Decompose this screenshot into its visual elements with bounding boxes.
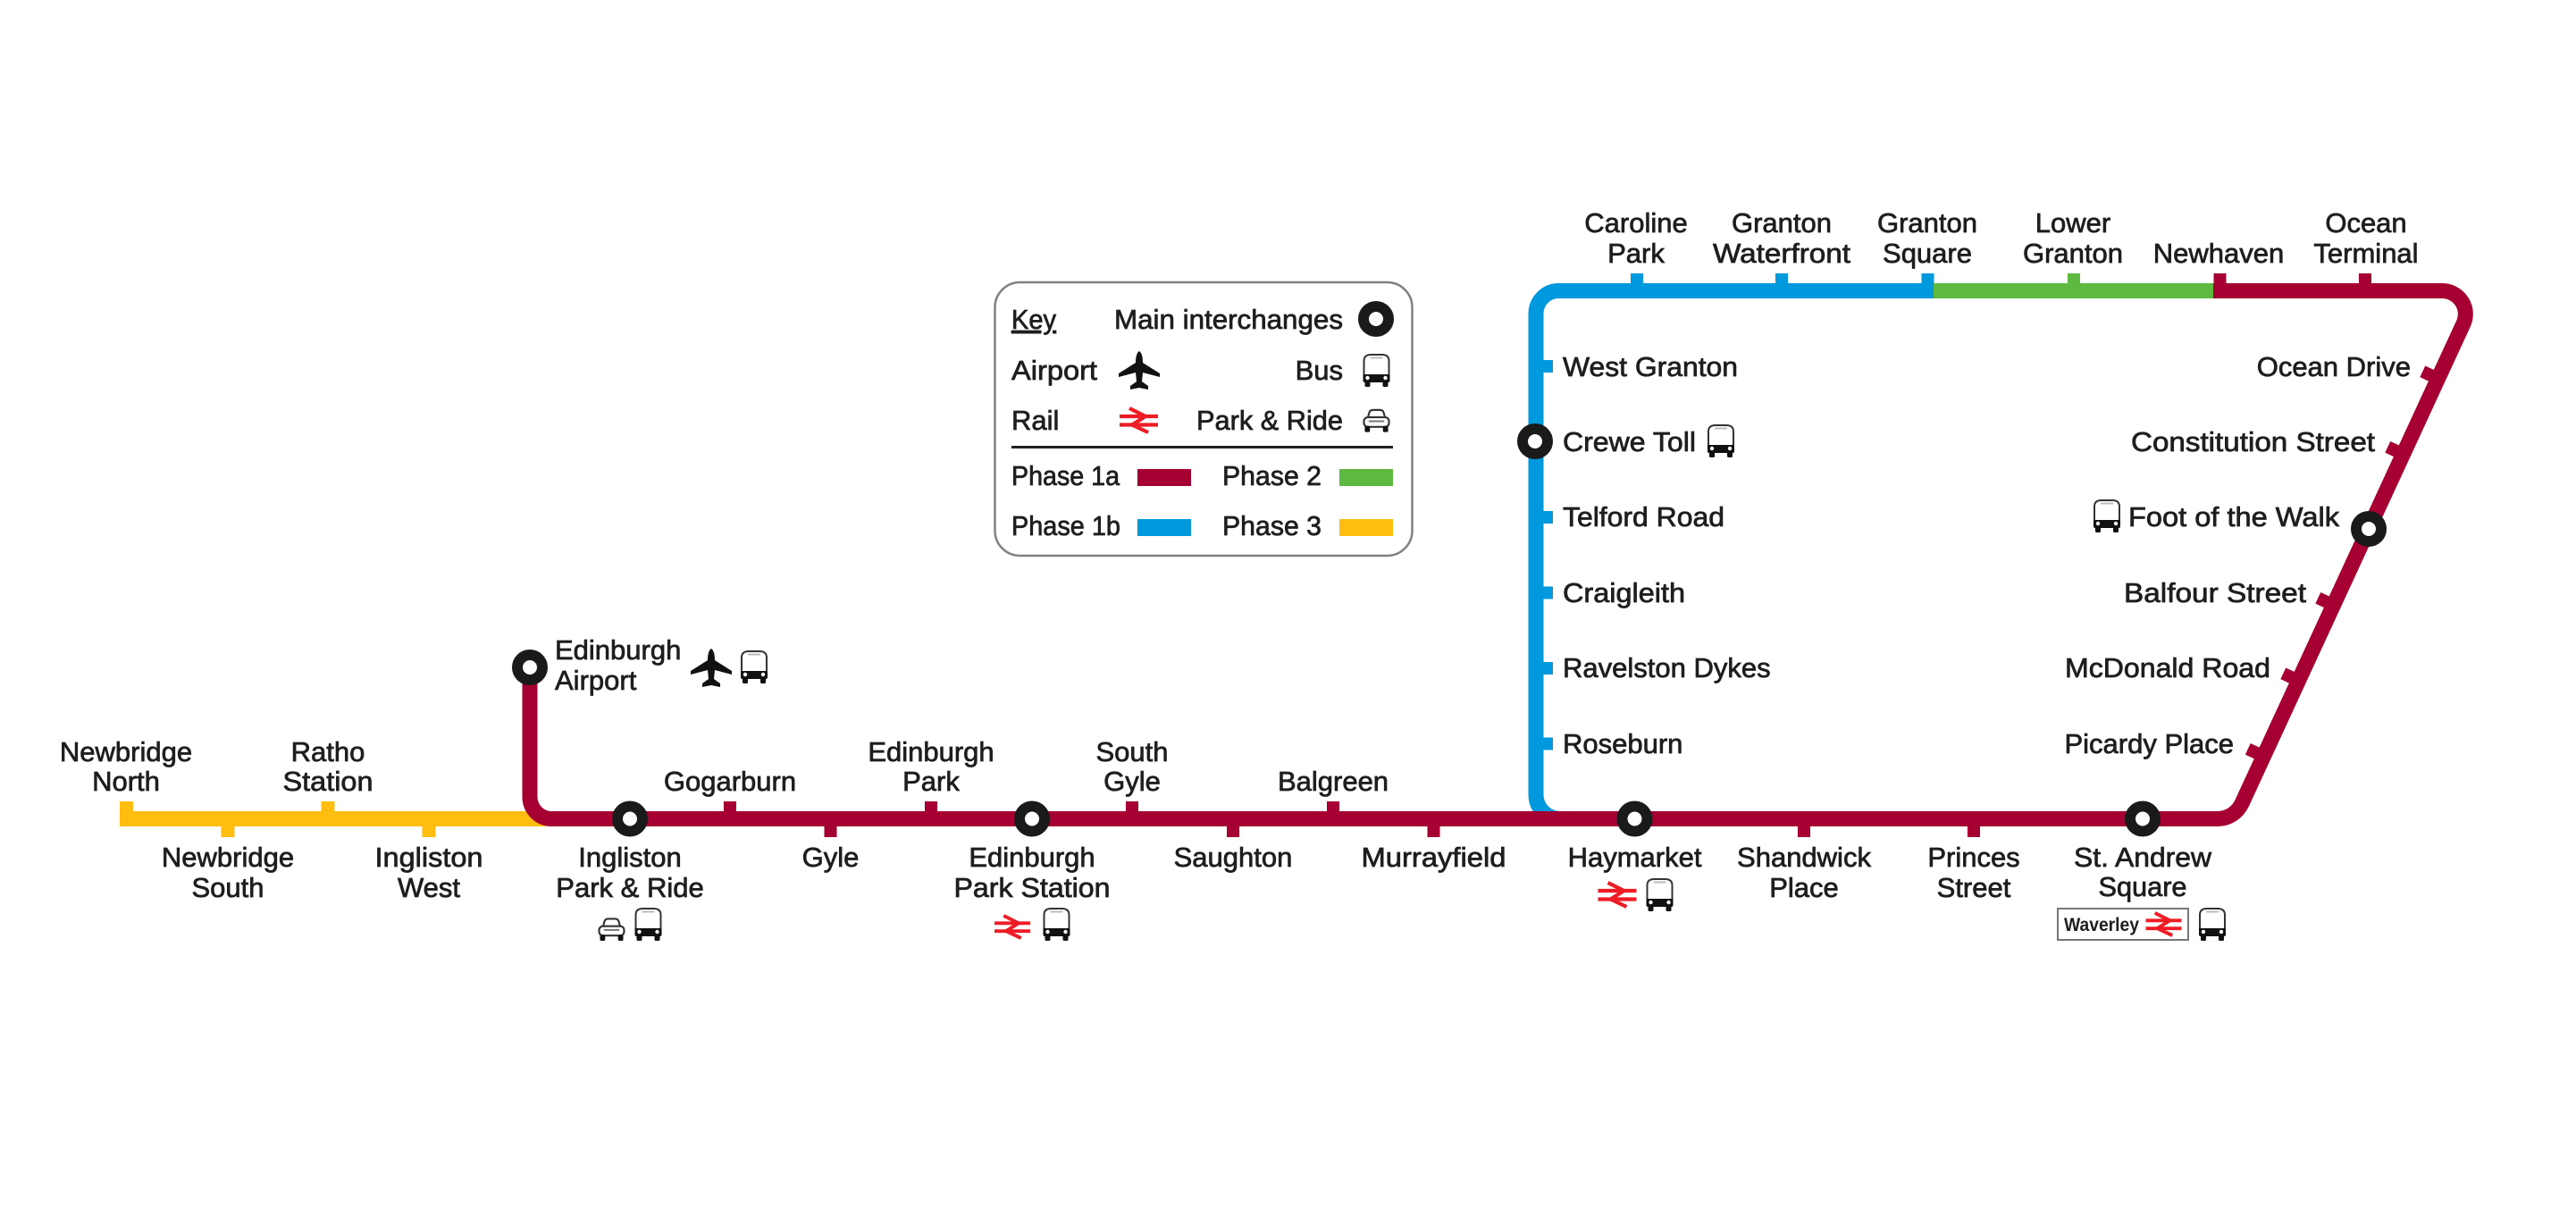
label: Gogarburn: Gogarburn [664,766,796,797]
label: Princes Street: Princes [1927,842,2020,873]
label: Ingliston West [375,842,482,903]
label: Craigleith: Craigleith [1563,577,1685,608]
label: Newbridge North: North [92,766,160,797]
key: airport [1011,351,1160,390]
key: phase 2: Phase 2 [1222,460,1322,491]
label: Ingliston Park and Ride: Ingliston [578,842,682,873]
label: Newhaven: Newhaven [2153,238,2284,269]
icons: Ingliston Park and Ride [600,909,661,941]
phase 1a line (red) [530,273,2465,837]
label: Shandwick Place: Shandwick [1737,842,1871,873]
label: Constitution Street: Constitution Street [2131,426,2375,457]
label: Edinburgh Airport: Airport [555,665,637,696]
key: phase 1a: Phase 1a [1011,460,1120,491]
key: main interchanges: Main interchanges [1114,304,1343,335]
phase 1b line (blue) [1536,273,1934,818]
label: Edinburgh Airport: Edinburgh [555,634,681,666]
label: Newbridge South: South [191,872,264,903]
label: St. Andrew Square [2074,842,2212,902]
label: Ratho Station: Station [282,766,373,797]
label: Murrayfield: Murrayfield [1362,842,1506,873]
label: Ravelston Dykes: Ravelston Dykes [1563,652,1771,683]
key: airport: Airport [1011,355,1097,386]
label: Ocean Drive: Ocean Drive [2257,351,2411,382]
key: rail [1011,405,1158,436]
label: Shandwick Place: Place [1769,872,1839,903]
icons: Edinburgh Airport [691,649,768,687]
phase 3 line (yellow) [120,801,547,837]
panel: key [995,282,1412,556]
label: Ingliston Park and Ride: Park & Ride [556,872,704,903]
key: park and ride: Park & Ride [1196,405,1343,436]
icons: Waverley rail and bus [2058,909,2226,941]
label: Gyle: Gyle [802,842,859,873]
label: Saughton: Saughton [1174,842,1292,873]
label: Ratho Station: Ratho [291,736,365,767]
label: Balfour Street: Balfour Street [2124,577,2306,608]
label: McDonald Road: McDonald Road [2065,652,2270,683]
icon: Crewe Toll bus [1708,425,1734,457]
label: Crewe Toll: Crewe Toll [1563,426,1696,457]
label: Edinburgh Park Station: Park Station [954,872,1110,903]
label: Granton Square: Granton [1877,207,1977,239]
icon: Foot of the Walk bus [2094,500,2120,532]
label: St. Andrew Square: Square [2098,871,2187,902]
label: Edinburgh Park: Edinburgh [868,736,994,767]
key: phase 1b: Phase 1b [1011,510,1120,541]
label: Caroline Park: Park [1607,238,1665,269]
key: phase 2 [1222,460,1393,491]
label: Haymarket: Haymarket [1568,842,1702,873]
label: Lower Granton: Lower [2035,207,2110,239]
label: Ingliston West: West [398,872,460,903]
label: Ocean Terminal: Ocean [2325,207,2407,239]
label: Edinburgh Park Station: Edinburgh [969,842,1095,873]
key: bus [1296,355,1390,387]
label: Picardy Place: Picardy Place [2064,728,2234,759]
icons: Haymarket [1598,879,1673,911]
label: Caroline Park: Caroline [1584,207,1688,239]
label: Edinburgh Park: Park [902,766,960,797]
key: phase 3: Phase 3 [1222,510,1322,541]
label: Lower Granton: Granton [2023,238,2123,269]
key: rail: Rail [1011,405,1059,436]
phase 2 line (green) [1934,273,2213,291]
label: Granton Square: Square [1883,238,1972,269]
label: Roseburn: Roseburn [1563,728,1682,759]
label: West Granton: West Granton [1563,351,1738,382]
label: Ocean Terminal: Terminal [2313,238,2419,269]
label: Ingliston West: Ingliston [375,842,482,873]
label: St. Andrew Square: St. Andrew [2074,842,2212,873]
key: bus: Bus [1296,355,1343,386]
label: Newbridge South: Newbridge [162,842,294,873]
label: Telford Road: Telford Road [1563,501,1724,532]
interchange markers [517,429,2381,831]
label: Granton Waterfront: Granton [1732,207,1832,239]
label: Granton Waterfront: Waterfront [1713,238,1850,269]
key: phase 1b [1011,510,1191,541]
label: Foot of the Walk: Foot of the Walk [2128,501,2340,532]
label: Balgreen: Balgreen [1278,766,1389,797]
key: phase 3 [1222,510,1393,541]
key heading: Key [1011,304,1056,335]
icons: Edinburgh Park Station [994,909,1070,941]
label: Princes Street: Street [1937,872,2011,903]
label: South Gyle: South [1095,736,1169,767]
label: Newbridge North: Newbridge [60,736,192,767]
icons: Waverley rail and bus: Waverley [2064,915,2139,935]
label: South Gyle: Gyle [1103,766,1161,797]
key: phase 1a [1011,460,1191,491]
